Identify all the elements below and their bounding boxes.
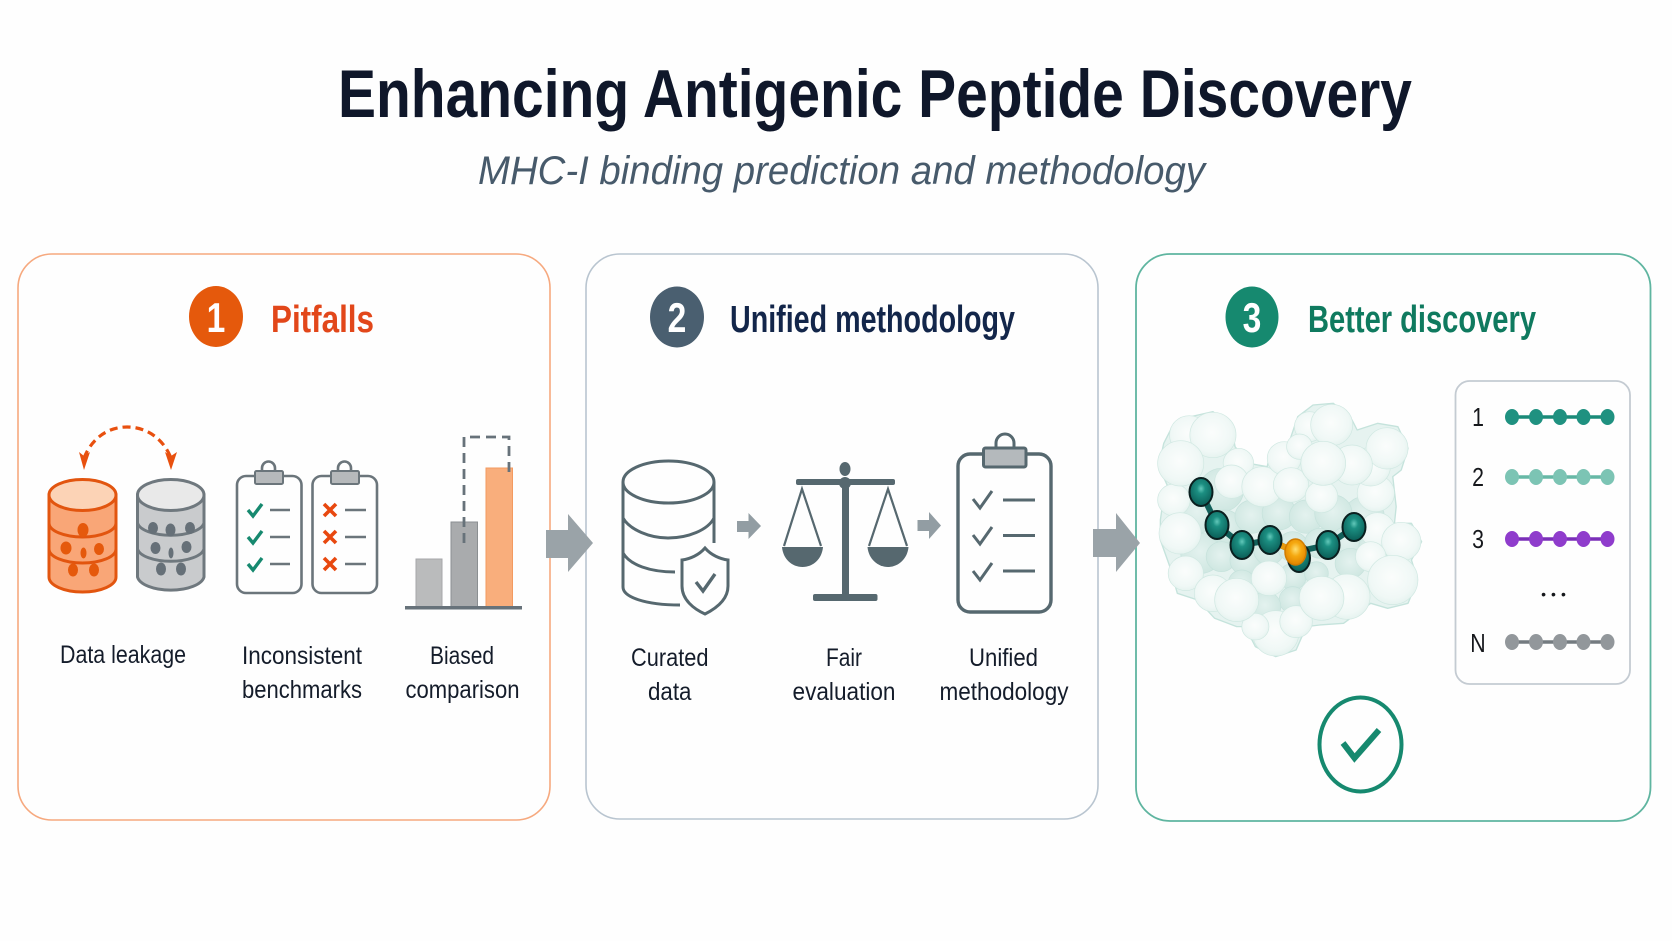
title: Enhancing Antigenic Peptide Discovery (338, 56, 1412, 132)
heading badge: 2: 2 (668, 296, 686, 342)
label: inconsistent benchmarks: Inconsistent (242, 642, 362, 670)
icon: clipboard with crosses (312, 462, 377, 593)
chart: biased comparison bars (405, 437, 522, 610)
label: biased comparison: Biased (430, 642, 494, 670)
rank 3 peptide (1472, 525, 1614, 555)
rank N peptide: N (1470, 629, 1486, 659)
icon: success check circle (1320, 698, 1402, 792)
heading badge: 1: 1 (207, 296, 225, 342)
label: unified methodology: Unified (969, 644, 1038, 672)
label: curated data: data (648, 678, 692, 706)
rank N peptide (1470, 629, 1614, 659)
heading: Better discovery: Better discovery (1308, 299, 1536, 341)
surface (1158, 403, 1422, 657)
icon: balance scale (782, 462, 908, 601)
heading: Pitfalls: Pitfalls (271, 299, 374, 341)
label: biased comparison: comparison (406, 676, 520, 704)
panel: unified methodology (586, 254, 1098, 819)
heading: Unified methodology: Unified methodology (730, 299, 1015, 341)
icon: orange database (49, 480, 116, 592)
arrow: unified to discovery (1093, 513, 1140, 572)
panel: pitfalls (18, 254, 550, 820)
heading badge: 3 (1226, 286, 1278, 348)
icon: gray database (138, 480, 204, 590)
molecule: MHC groove surface with peptide (1158, 403, 1422, 657)
arrow: pitfalls to unified (546, 514, 593, 572)
label: inconsistent benchmarks (242, 642, 362, 704)
subtitle: MHC-I binding prediction and methodology (478, 149, 1208, 193)
label: fair evaluation (792, 644, 896, 706)
label: curated data: Curated (631, 644, 708, 672)
label: unified methodology (940, 644, 1069, 706)
label: biased comparison (406, 642, 520, 704)
label: curated data (631, 644, 708, 706)
rank 1 peptide: 1 (1472, 403, 1484, 433)
ellipsis: ••• (1541, 586, 1571, 602)
icon: shield check (682, 548, 728, 614)
label: unified methodology: methodology (940, 678, 1069, 706)
label: data leakage: Data leakage (60, 641, 186, 669)
peptide chain (1190, 478, 1366, 572)
icon: clipboard with checks (237, 462, 302, 593)
ranking legend box (1456, 381, 1630, 684)
rank 3 peptide: 3 (1472, 525, 1484, 555)
heading badge: 2 (650, 286, 704, 348)
arrowhead right (165, 452, 177, 470)
rank 1 peptide (1472, 403, 1614, 433)
icon: data leakage databases (49, 427, 204, 592)
label: inconsistent benchmarks: benchmarks (242, 676, 362, 704)
arrow: fair to unified (918, 512, 941, 539)
heading badge: 1 (189, 286, 243, 347)
arrow: curated to fair (737, 513, 761, 539)
arrow: dashed leakage arc (84, 427, 171, 458)
rank 2 peptide: 2 (1472, 463, 1484, 493)
label: fair evaluation: Fair (826, 644, 862, 672)
heading badge: 3: 3 (1243, 296, 1261, 342)
rank 2 peptide (1472, 463, 1614, 493)
panel: better discovery (1136, 254, 1650, 821)
label: fair evaluation: evaluation (792, 678, 896, 706)
arrowhead left (79, 452, 90, 470)
icon: methodology clipboard (958, 434, 1051, 612)
icon: curated database with shield (623, 461, 728, 614)
